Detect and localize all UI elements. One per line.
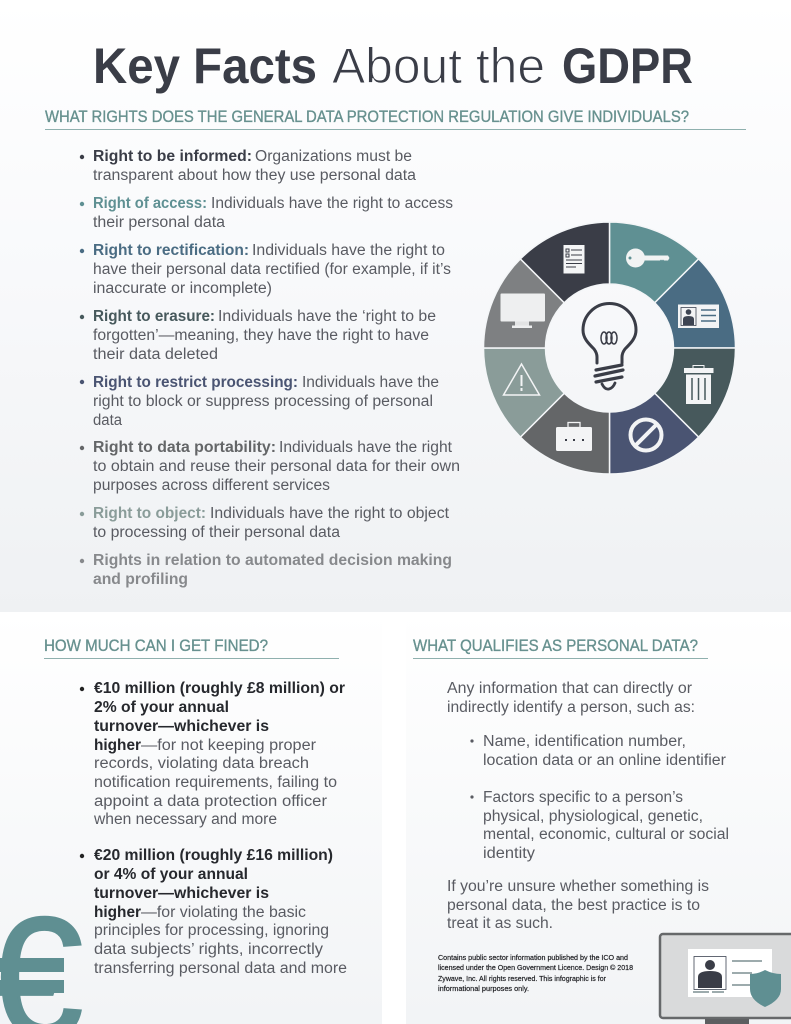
- wheel segment: trash: [655, 348, 736, 437]
- right to erasure: Individuals have the ‘right to be: [218, 308, 436, 325]
- wheel segment: document: [520, 222, 610, 303]
- right to be informed: [80, 148, 416, 184]
- source note: Contains public sector information published by the ICO and: [438, 953, 628, 962]
- fine tier one: notification requirements, failing to: [94, 774, 337, 791]
- rights on automated decision making: [80, 552, 452, 588]
- bullet: identifiers: location data or an online identifier: [483, 752, 726, 769]
- right to restrict processing: [80, 374, 439, 429]
- fine tier two: principles for processing, ignoring: [94, 922, 329, 939]
- right of access: Individuals have the right to access: [211, 195, 453, 212]
- right to object: to processing of their personal data: [93, 524, 340, 541]
- right to be informed: transparent about how they use personal data: [93, 167, 416, 184]
- title: Key Facts: [93, 38, 317, 94]
- closing advice: treat it as such.: [447, 915, 553, 932]
- right to rectification: [80, 242, 451, 297]
- right to data portability: purposes across different services: [93, 477, 330, 494]
- intro text: Any information that can directly or: [447, 680, 692, 697]
- icon: light bulb: [583, 304, 636, 389]
- rights on automated decision making: and profiling: [93, 571, 188, 588]
- fine tier two: —for violating the basic: [141, 904, 306, 921]
- right to rectification: Individuals have the right to: [252, 242, 445, 259]
- right to erasure: their data deleted: [93, 346, 218, 363]
- closing advice: personal data, the best practice is to: [447, 897, 700, 914]
- icon: warning triangle: [504, 364, 540, 395]
- bullet: identifiers: Name, identification number,: [483, 733, 686, 750]
- wheel segment: warning: [484, 348, 564, 437]
- right to rectification: inaccurate or incomplete): [93, 280, 272, 297]
- right to data portability: Individuals have the right: [279, 439, 453, 456]
- bullet: personal factors: identity: [483, 845, 535, 862]
- icon: id card: [678, 304, 719, 328]
- rights on automated decision making: Rights in relation to automated decision making: [93, 552, 452, 569]
- closing advice: [447, 878, 709, 932]
- right to rectification: have their personal data rectified (for example, if it’s: [93, 261, 451, 278]
- right to erasure: Right to erasure:: [93, 308, 215, 325]
- fine tier two: transferring personal data and more: [94, 960, 347, 977]
- title: About the: [332, 38, 545, 94]
- bullet: personal factors: physical, physiological, genetic,: [483, 808, 703, 825]
- fine tier two: turnover—whichever is: [94, 885, 269, 902]
- intro text: indirectly identify a person, such as:: [447, 699, 695, 716]
- right to rectification: Right to rectification:: [93, 242, 249, 259]
- right to erasure: forgotten’—meaning, they have the right to have: [93, 327, 429, 344]
- fine tier one: appoint a data protection officer: [94, 793, 327, 810]
- icon: trash can: [684, 366, 714, 404]
- heading: personal data: WHAT QUALIFIES AS PERSONAL DATA?: [413, 637, 698, 655]
- wheel segment: block sign: [610, 393, 699, 474]
- title: GDPR: [562, 38, 693, 94]
- heading: fines: HOW MUCH CAN I GET FINED?: [44, 637, 268, 655]
- bullet: personal factors: [470, 789, 729, 862]
- bullet: personal factors: mental, economic, cultural or social: [483, 826, 729, 843]
- fine tier one: when necessary and more: [93, 811, 277, 828]
- panel: personal data: [413, 637, 791, 1024]
- fine tier one: turnover—whichever is: [94, 718, 269, 735]
- wheel segment: briefcase: [520, 393, 610, 474]
- closing advice: If you’re unsure whether something is: [447, 878, 709, 895]
- source note: informational purposes only.: [438, 984, 529, 993]
- fine tier one: 2% of your annual: [94, 699, 229, 716]
- right to restrict processing: Individuals have the: [302, 374, 439, 391]
- bullet: identifiers: [470, 733, 726, 769]
- right to erasure: [80, 308, 436, 363]
- icon: monitor: [500, 294, 545, 328]
- fine tier two: data subjects’ rights, incorrectly: [94, 941, 323, 958]
- wheel segment: key: [610, 222, 699, 303]
- intro text: [447, 680, 695, 716]
- icon: document: [564, 245, 584, 274]
- icon: monitor with id and shield: [660, 934, 791, 1024]
- right to object: Individuals have the right to object: [210, 505, 450, 522]
- right of access: their personal data: [93, 214, 225, 231]
- source note: licensed under the Open Government Licence. Design © 2018: [438, 963, 633, 972]
- right to data portability: to obtain and reuse their personal data for their own: [93, 458, 460, 475]
- fine tier one: records, violating data breach: [94, 755, 309, 772]
- fine tier one: higher: [94, 737, 141, 754]
- right to restrict processing: Right to restrict processing:: [93, 374, 298, 391]
- right to data portability: Right to data portability:: [93, 439, 276, 456]
- icon: block sign: [630, 420, 662, 450]
- fine tier one: €10 million (roughly £8 million) or: [94, 680, 345, 697]
- right to object: Right to object:: [93, 505, 206, 522]
- list: individual rights: [80, 148, 460, 588]
- source note: Zywave, Inc. All rights reserved. This infographic is for: [438, 974, 606, 983]
- fine tier two: [80, 847, 347, 977]
- wheel segment: id card: [655, 259, 736, 348]
- right to restrict processing: right to block or suppress processing of personal: [93, 393, 433, 410]
- fine tier two: higher: [94, 904, 141, 921]
- right to object: [80, 505, 450, 541]
- right to restrict processing: data: [93, 412, 122, 429]
- panel: fines: [0, 637, 347, 1024]
- icon: briefcase: [556, 422, 592, 451]
- right of access: [80, 195, 453, 231]
- icon: key: [626, 248, 670, 268]
- title: [93, 38, 693, 94]
- right of access: Right of access:: [93, 195, 207, 212]
- fine tier one: —for not keeping proper: [141, 737, 316, 754]
- fine tier two: or 4% of your annual: [94, 866, 248, 883]
- right to be informed: Organizations must be: [255, 148, 412, 165]
- wheel diagram: [484, 222, 736, 474]
- source note: [438, 953, 633, 993]
- wheel segment: monitor: [484, 259, 564, 348]
- fine tier two: €20 million (roughly £16 million): [94, 847, 333, 864]
- fine tier one: [80, 680, 345, 828]
- right to data portability: [80, 439, 460, 494]
- heading: rights: WHAT RIGHTS DOES THE GENERAL DATA PROTECTION REGULATION GIVE INDIVIDUALS?: [45, 108, 689, 126]
- bullet: personal factors: Factors specific to a person’s: [483, 789, 683, 806]
- right to be informed: Right to be informed:: [93, 148, 252, 165]
